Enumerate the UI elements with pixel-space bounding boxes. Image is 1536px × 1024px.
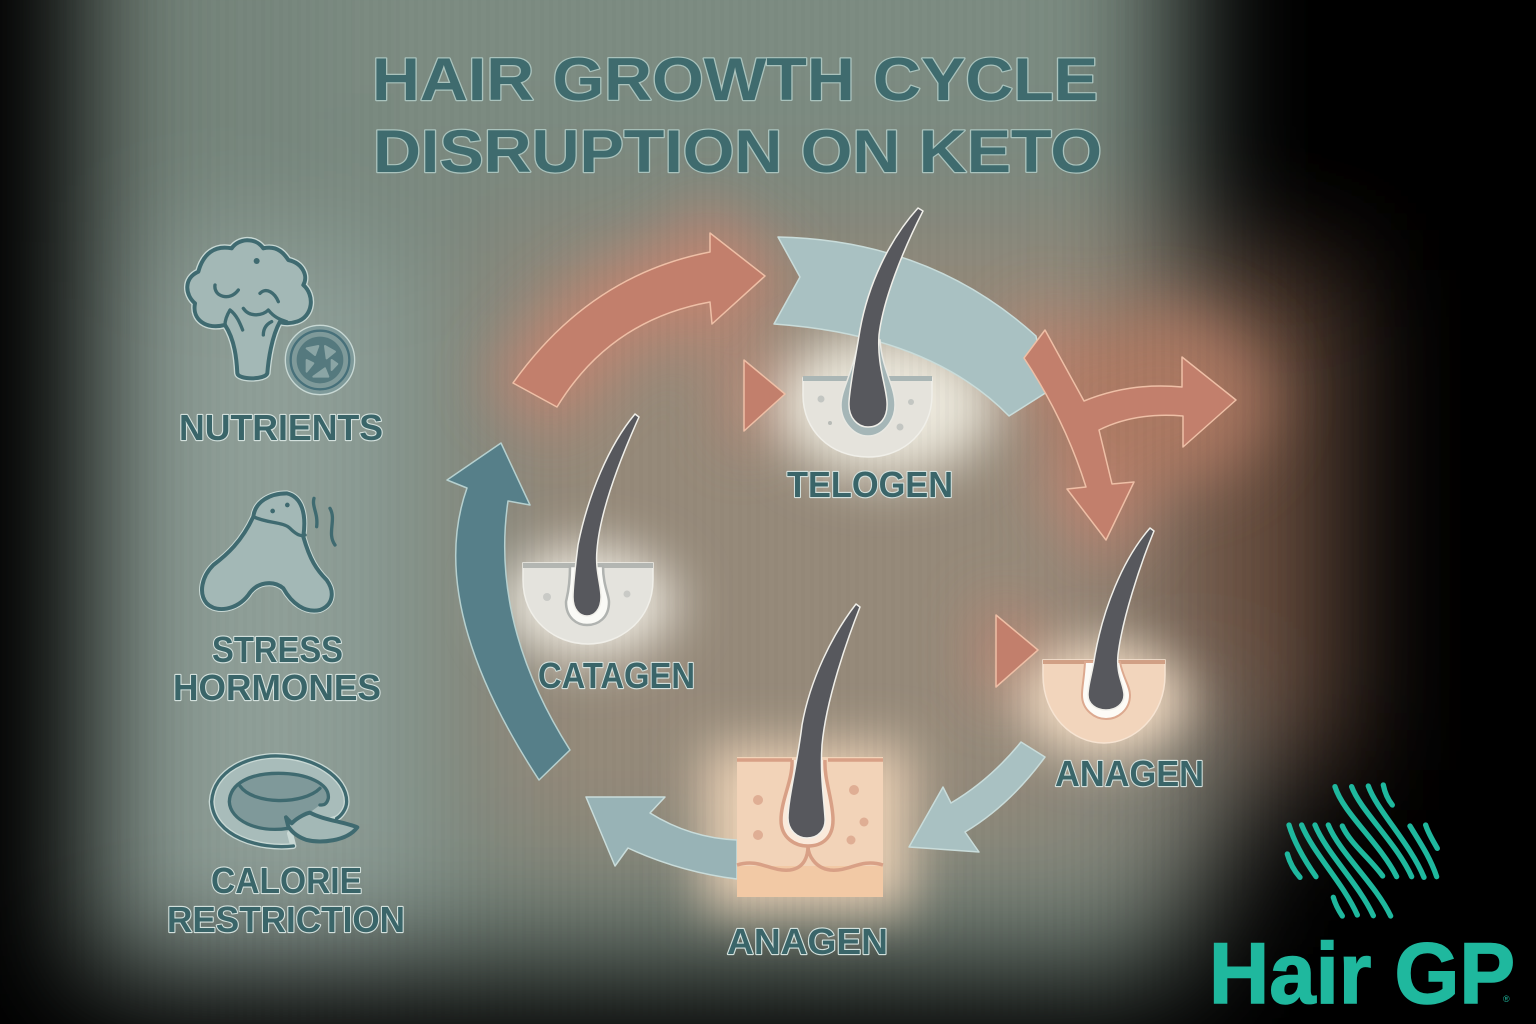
arrow: telogen band xyxy=(774,237,1047,416)
label: stress hormones: HORMONES xyxy=(173,667,381,708)
title: HAIR GROWTH CYCLE xyxy=(372,46,1098,113)
follicle: telogen xyxy=(803,208,932,457)
label: anagen upper: ANAGEN xyxy=(1055,753,1204,794)
follicle: catagen xyxy=(523,414,653,644)
label: telogen: TELOGEN xyxy=(787,464,953,505)
icon: hair strand cross xyxy=(1287,785,1437,916)
arrow: catagen to telogen xyxy=(513,233,765,407)
title: DISRUPTION ON KETO xyxy=(373,118,1102,185)
label: catagen: CATAGEN xyxy=(538,655,695,696)
icon: broccoli with nutrient coin xyxy=(187,240,355,395)
label: stress hormones: STRESS xyxy=(212,629,343,670)
title xyxy=(372,46,1102,185)
label: nutrients: NUTRIENTS xyxy=(179,407,383,448)
label: anagen lower: ANAGEN xyxy=(727,921,888,962)
logo: Hair GP: Hair GP xyxy=(1209,926,1515,1022)
arrow: small triangle to telogen xyxy=(744,360,785,431)
icon: plate with leaf xyxy=(212,756,357,847)
arrow: anagen to lower anagen xyxy=(909,742,1045,852)
label: stress hormones xyxy=(173,629,381,708)
label: calorie restriction: CALORIE xyxy=(211,860,362,901)
icon: stress figure xyxy=(202,493,335,611)
logo: Hair GP: ® xyxy=(1503,994,1510,1004)
follicle: anagen skin block xyxy=(737,604,883,897)
arrow: lower anagen to catagen xyxy=(586,797,737,879)
arrow: catagen return arrow xyxy=(447,443,570,780)
follicle: anagen upper xyxy=(1043,528,1165,743)
arrow: small triangle to anagen xyxy=(996,615,1038,687)
label: calorie restriction xyxy=(167,860,405,940)
arrow: forked disruption arrow xyxy=(1024,330,1236,540)
logo: Hair GP xyxy=(1209,785,1515,1022)
label: calorie restriction: RESTRICTION xyxy=(167,899,405,940)
